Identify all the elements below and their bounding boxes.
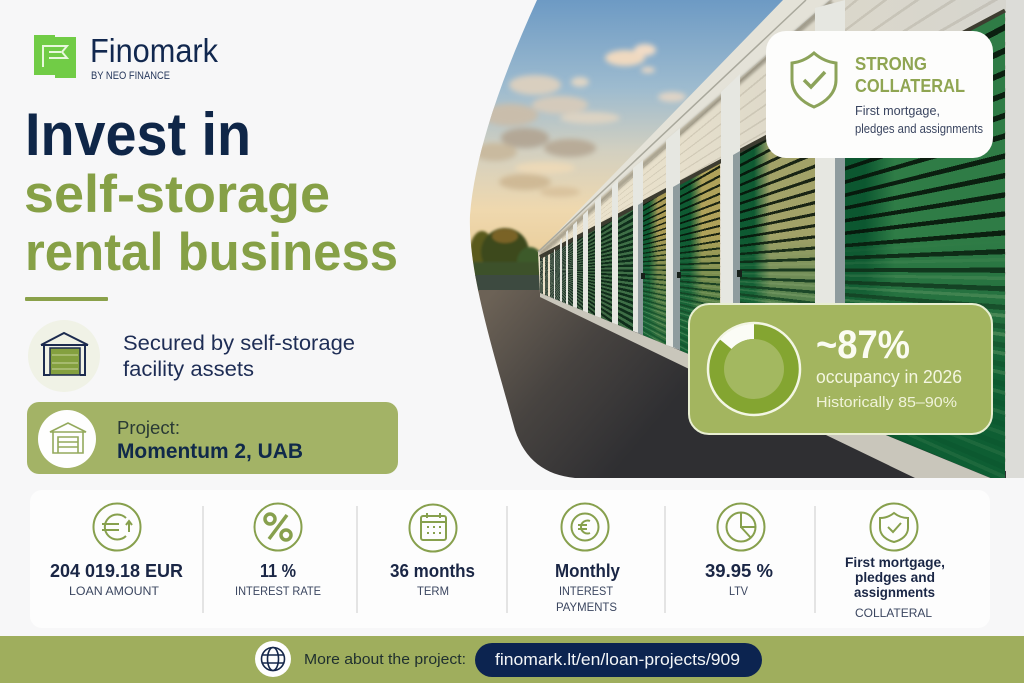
photo: self-storage building at sunset bbox=[470, 0, 1024, 478]
stat: term bbox=[390, 504, 475, 598]
stat: interest rate bbox=[235, 504, 321, 598]
panel: project: Momentum 2, UAB bbox=[117, 440, 303, 463]
stat: ltv bbox=[705, 504, 773, 598]
title: rental business bbox=[25, 223, 398, 282]
panel: occupancy bbox=[689, 304, 992, 434]
panel: strong collateral: STRONG bbox=[855, 54, 927, 74]
trees bbox=[469, 228, 543, 279]
panel: strong collateral: First mortgage, bbox=[855, 103, 940, 118]
panel: strong collateral: pledges and assignments bbox=[855, 121, 983, 136]
logo: Finomark bbox=[34, 32, 218, 82]
title bbox=[24, 101, 398, 282]
stat: collateral: pledges and bbox=[855, 569, 935, 585]
panel: project: Project: bbox=[117, 418, 180, 438]
title: self-storage bbox=[24, 165, 330, 224]
donut chart bbox=[708, 323, 800, 415]
panel: strong collateral bbox=[766, 31, 993, 158]
icon: shield bbox=[792, 53, 836, 107]
stat: term: 36 months bbox=[390, 561, 475, 581]
stat: collateral: First mortgage, bbox=[845, 554, 945, 570]
title rule bbox=[25, 297, 108, 301]
link pill: finomark.lt/en/loan-projects/909 bbox=[495, 650, 740, 669]
link pill bbox=[475, 643, 762, 677]
icon: garage bbox=[28, 320, 100, 392]
stat: interest rate: 11 % bbox=[260, 561, 296, 581]
curb bbox=[540, 293, 1005, 484]
stat: term: TERM bbox=[417, 584, 449, 598]
stat: interest rate: INTEREST RATE bbox=[235, 584, 321, 598]
stat: interest payments bbox=[555, 504, 620, 614]
panel: key loan figures bbox=[30, 490, 990, 628]
secured by text bbox=[123, 331, 355, 381]
panel: strong collateral: COLLATERAL bbox=[855, 76, 965, 96]
icon: globe bbox=[255, 641, 291, 677]
icon: project garage bbox=[38, 410, 96, 468]
stat: ltv: 39.95 % bbox=[705, 561, 773, 581]
logo: Finomark: Finomark bbox=[90, 32, 218, 69]
logo: Finomark: BY NEO FINANCE bbox=[91, 70, 170, 82]
stat: ltv: LTV bbox=[729, 584, 748, 598]
stat: collateral: assignments bbox=[854, 584, 935, 600]
panel: occupancy: occupancy in 2026 bbox=[816, 367, 962, 387]
secured by text: facility assets bbox=[123, 357, 254, 381]
stat: loan amount: LOAN AMOUNT bbox=[69, 584, 160, 598]
panel: occupancy: ~87% bbox=[816, 323, 910, 367]
stat: interest payments: INTEREST bbox=[559, 584, 614, 598]
stat: interest payments: Monthly bbox=[555, 561, 620, 581]
stat: loan amount: 204 019.18 EUR bbox=[50, 561, 183, 581]
stat: collateral bbox=[845, 504, 945, 620]
pillars bbox=[554, 0, 845, 350]
panel: occupancy: Historically 85–90% bbox=[816, 394, 957, 411]
footer band bbox=[0, 636, 1024, 683]
title: Invest in bbox=[25, 101, 251, 168]
stat: collateral: COLLATERAL bbox=[855, 606, 932, 620]
panel: project bbox=[27, 402, 398, 474]
footer band: More about the project: bbox=[304, 651, 466, 668]
roof fascia bbox=[538, 0, 830, 252]
stat: interest payments: PAYMENTS bbox=[556, 600, 617, 614]
door latches bbox=[641, 270, 742, 279]
stat: loan amount bbox=[50, 504, 183, 598]
secured by text: Secured by self-storage bbox=[123, 331, 355, 355]
